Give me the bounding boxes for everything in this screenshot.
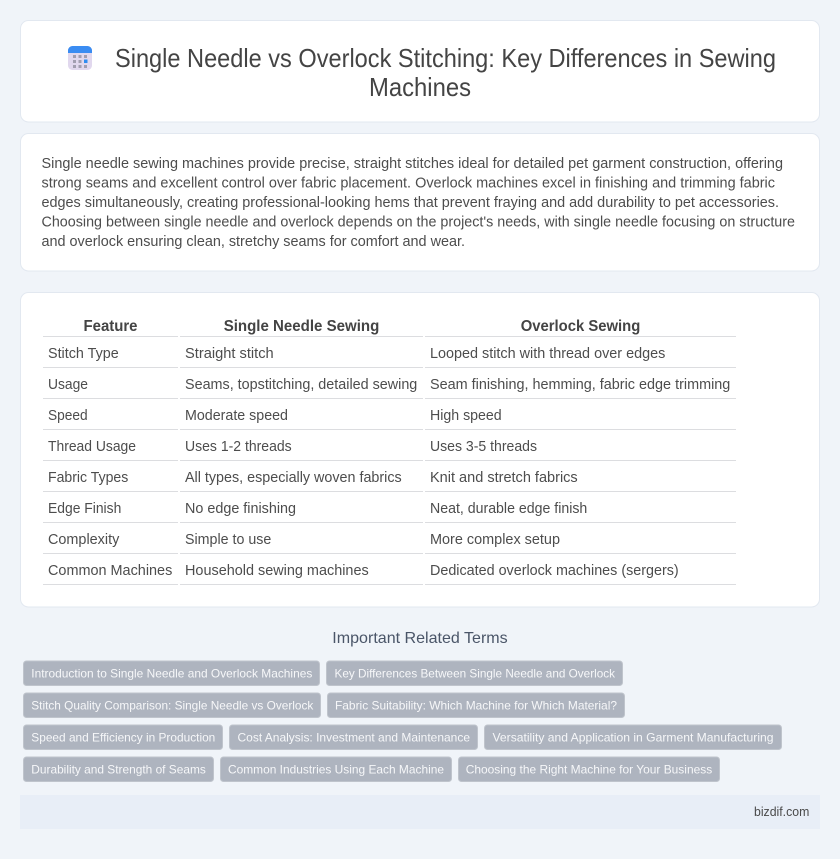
table header row: [84, 318, 640, 335]
panel: introduction paragraph: [20, 134, 820, 271]
row: speed: Speed: [48, 408, 88, 424]
row: fabric types: Fabric Types: [48, 470, 128, 486]
row: complexity: Simple to use: [185, 532, 271, 548]
row: usage: Seams, topstitching, detailed sewing: [185, 377, 417, 393]
footer bar: [20, 795, 820, 829]
tag: Choosing the Right Machine for Your Business: [466, 762, 712, 776]
row: thread usage: [48, 439, 537, 455]
tag: [328, 693, 624, 718]
intro text: Choosing between single needle and overlock depends on the project's needs, with single needle focusing on structure: [42, 214, 795, 230]
tag: Common Industries Using Each Machine: [228, 762, 444, 776]
tag: [326, 661, 622, 686]
row: stitch type: Looped stitch with thread over edges: [430, 346, 665, 362]
icon: calendar grid: [68, 46, 92, 70]
table header row: Overlock Sewing: [521, 318, 640, 335]
tag: [24, 757, 214, 782]
tag: Versatility and Application in Garment Manufacturing: [492, 730, 774, 744]
row: complexity: More complex setup: [430, 532, 560, 548]
intro text: edges simultaneously, creating professional-looking hems that prevent fraying and add durability to pet accessories.: [42, 195, 779, 211]
row: fabric types: All types, especially woven fabrics: [185, 470, 402, 486]
title: Single Needle vs Overlock Stitching: Key Differences in Sewing: [115, 45, 776, 73]
row: speed: Moderate speed: [185, 408, 288, 424]
row: edge finish: Neat, durable edge finish: [430, 501, 587, 517]
intro text: [42, 156, 795, 250]
row: fabric types: [48, 470, 578, 486]
tag: Cost Analysis: Investment and Maintenance: [238, 730, 470, 744]
tag: Fabric Suitability: Which Machine for Which Material?: [335, 698, 617, 712]
title: [115, 45, 776, 102]
tag: Key Differences Between Single Needle and Overlock: [334, 666, 616, 680]
row: common machines: Common Machines: [48, 563, 172, 579]
row: complexity: Complexity: [48, 532, 120, 548]
row: edge finish: Edge Finish: [48, 501, 121, 517]
row: thread usage: Uses 3-5 threads: [430, 439, 537, 455]
row: speed: High speed: [430, 408, 502, 424]
header panel: [20, 20, 820, 122]
row: usage: [48, 377, 730, 393]
tag: Durability and Strength of Seams: [31, 762, 206, 776]
row: usage: Seam finishing, hemming, fabric edge trimming: [430, 377, 730, 393]
tag: [484, 725, 782, 750]
row: fabric types: Knit and stretch fabrics: [430, 470, 578, 486]
tag: [24, 693, 320, 718]
row: speed: [48, 408, 502, 424]
row: stitch type: Stitch Type: [48, 346, 119, 362]
intro text: strong seams and excellent control over fabric placement. Overlock machines excel in finishing and trimming fabric: [42, 176, 775, 192]
row: thread usage: Thread Usage: [48, 439, 136, 455]
tag: [24, 725, 222, 750]
row: stitch type: Straight stitch: [185, 346, 274, 362]
tag: Stitch Quality Comparison: Single Needle vs Overlock: [31, 698, 314, 712]
row: usage: Usage: [48, 377, 88, 393]
row: edge finish: No edge finishing: [185, 501, 296, 517]
row: stitch type: [48, 346, 665, 362]
tag: [230, 725, 478, 750]
tag: [24, 661, 320, 686]
heading: important related terms: Important Related Terms: [332, 630, 508, 647]
panel: comparison table: [20, 292, 820, 607]
related term tags: [24, 661, 782, 782]
tag: Speed and Efficiency in Production: [31, 730, 215, 744]
tag: [458, 757, 720, 782]
row: thread usage: Uses 1-2 threads: [185, 439, 292, 455]
table header row: Single Needle Sewing: [224, 318, 379, 335]
tag: [220, 757, 452, 782]
row: common machines: Dedicated overlock machines (sergers): [430, 563, 679, 579]
title: Machines: [369, 74, 471, 102]
table header row: Feature: [84, 318, 138, 335]
intro text: Single needle sewing machines provide precise, straight stitches ideal for detailed pet garment construction, offering: [42, 156, 783, 172]
intro text: and overlock ensuring clean, stretchy seams for comfort and wear.: [42, 234, 465, 250]
row: common machines: [48, 563, 679, 579]
row: common machines: Household sewing machines: [185, 563, 369, 579]
row: edge finish: [48, 501, 587, 517]
tag: Introduction to Single Needle and Overlock Machines: [31, 666, 312, 680]
footer bar: bizdif.com: [754, 804, 809, 819]
row: complexity: [48, 532, 560, 548]
